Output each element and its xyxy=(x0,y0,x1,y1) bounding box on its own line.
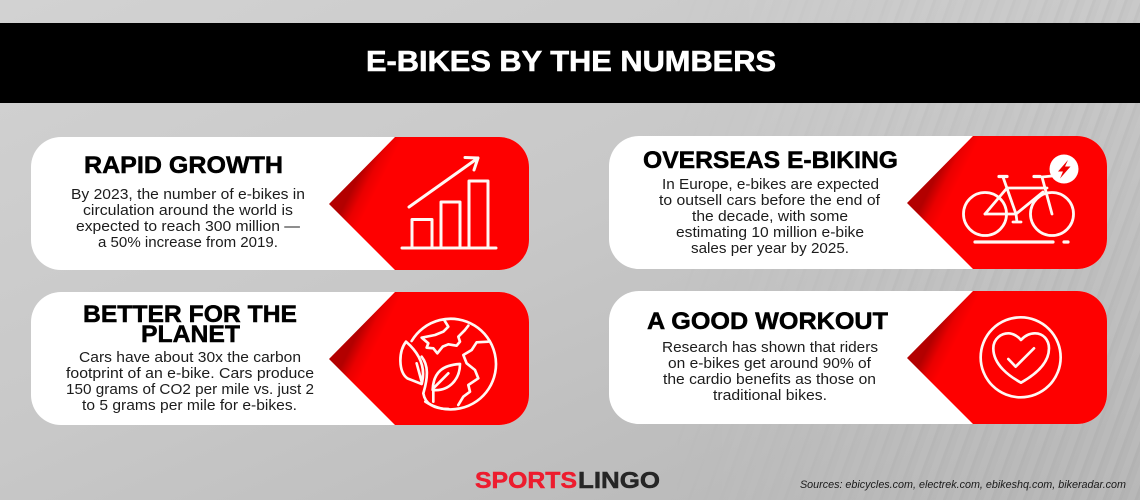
body text xyxy=(659,177,881,257)
heading: OVERSEAS E-BIKING xyxy=(643,147,898,174)
body text: In Europe, e-bikes are expected xyxy=(662,177,879,193)
panel: better for the planet xyxy=(31,292,529,425)
body text: sales per year by 2025. xyxy=(691,241,849,257)
body text: on e-bikes get around 90% of xyxy=(668,356,872,372)
icon: growth bar chart xyxy=(402,158,496,248)
icon: globe with leaves xyxy=(400,319,496,409)
panel: overseas e-biking xyxy=(609,136,1107,269)
logo: LINGO xyxy=(578,467,660,493)
body text: Research has shown that riders xyxy=(662,340,878,356)
card base xyxy=(31,137,529,270)
body text: estimating 10 million e-bike xyxy=(676,225,864,241)
body text: expected to reach 300 million — xyxy=(76,219,301,235)
title: E-BIKES BY THE NUMBERS xyxy=(366,46,776,78)
body text: the decade, with some xyxy=(692,209,848,225)
panel: a good workout xyxy=(609,291,1107,424)
heading: BETTER FOR THE xyxy=(83,301,297,328)
icon: charge badge xyxy=(1050,154,1078,184)
body text: Cars have about 30x the carbon xyxy=(79,350,301,366)
body text xyxy=(71,187,305,251)
heading: A GOOD WORKOUT xyxy=(647,308,888,335)
icon: heart with check xyxy=(981,317,1061,397)
heading: RAPID GROWTH xyxy=(84,152,283,179)
body text: circulation around the world is xyxy=(83,203,293,219)
body text: traditional bikes. xyxy=(713,388,827,404)
logo xyxy=(475,467,660,493)
body text: to 5 grams per mile for e-bikes. xyxy=(82,398,297,414)
sources: Sources: ebicycles.com, electrek.com, ebikeshq.com, bikeradar.com xyxy=(800,479,1126,491)
body text: the cardio benefits as those on xyxy=(663,372,876,388)
logo: SPORTS xyxy=(475,467,577,493)
panel: rapid growth xyxy=(31,137,529,270)
body text: a 50% increase from 2019. xyxy=(98,235,278,251)
body text xyxy=(662,340,878,404)
card base xyxy=(609,136,1107,269)
body text: 150 grams of CO2 per mile vs. just 2 xyxy=(66,382,314,398)
body text xyxy=(66,350,314,414)
card base xyxy=(609,291,1107,424)
body text: By 2023, the number of e-bikes in xyxy=(71,187,305,203)
heading: PLANET xyxy=(141,321,240,348)
icon: electric bike xyxy=(964,154,1078,242)
header band xyxy=(0,23,1140,103)
card base xyxy=(31,292,529,425)
heading xyxy=(83,301,297,348)
body text: to outsell cars before the end of xyxy=(659,193,881,209)
body text: footprint of an e-bike. Cars produce xyxy=(66,366,314,382)
